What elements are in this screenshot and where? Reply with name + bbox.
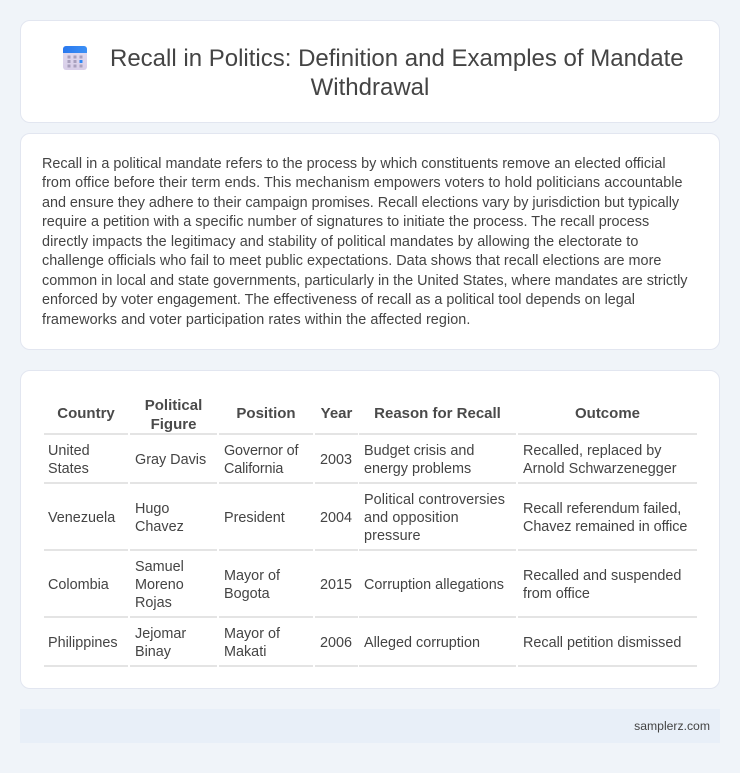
row: United States: California [224, 461, 283, 477]
row: Venezuela: Recall referendum failed, [523, 501, 681, 517]
table header: Figure [151, 416, 196, 433]
row: United States: Recalled, replaced by [523, 443, 661, 459]
row: Venezuela: President [224, 510, 285, 526]
row: Colombia: Colombia [48, 577, 109, 593]
table header: Reason for Recall [374, 405, 501, 422]
panel: description [20, 133, 720, 350]
row: Colombia: Corruption allegations [364, 577, 504, 593]
row: United States: energy problems [364, 461, 471, 477]
row: Colombia: Moreno [135, 577, 184, 593]
row: Colombia: Bogota [224, 586, 270, 602]
row: Venezuela: Hugo [135, 501, 169, 517]
text block: description paragraph: challenge officials who fail to meet public expectations. Data shows that recall elections are more [42, 253, 661, 269]
footer bar [20, 709, 720, 743]
title: Recall in Politics: Definition and Examples of Mandate [110, 45, 684, 72]
row: Colombia [48, 559, 681, 611]
row: Philippines: Alleged corruption [364, 635, 480, 651]
footer text: samplerz.com [634, 719, 710, 733]
text block: description paragraph [42, 156, 688, 328]
row: Venezuela: 2004 [320, 510, 352, 526]
row: United States [48, 443, 677, 477]
text block: description paragraph: from office before their term ends. This mechanism empowers voters to hold politicians accountable [42, 175, 683, 191]
row: United States: Budget crisis and [364, 443, 474, 459]
row: Philippines [48, 626, 681, 660]
row: Venezuela: Venezuela [48, 510, 115, 526]
text block: description paragraph: directly impacts the legitimacy and stability of political mandates by allowing the electorate to [42, 234, 638, 250]
row: Philippines: Recall petition dismissed [523, 635, 681, 651]
table header: Political [145, 397, 202, 414]
text block: description paragraph: Recall in a political mandate refers to the process by which constituents remove an elected official [42, 156, 666, 172]
row: Colombia: 2015 [320, 577, 352, 593]
row: Venezuela: and opposition [364, 510, 459, 526]
title: Withdrawal [311, 74, 429, 101]
table header: Outcome [575, 405, 640, 422]
text block: description paragraph: common in local and state governments, particularly in the United States, where mandates are strictly [42, 273, 688, 289]
row: Colombia: from office [523, 586, 590, 602]
table header: Position [236, 405, 296, 422]
row: Philippines: Philippines [48, 635, 118, 651]
row: United States: States [48, 461, 89, 477]
row: Venezuela: Chavez [135, 519, 184, 535]
row: United States: United [48, 443, 90, 459]
row: United States: 2003 [320, 452, 352, 468]
text block: description paragraph: frameworks and voter participation rates within the affected region. [42, 312, 470, 328]
row: Venezuela: Political controversies [364, 492, 505, 508]
icon: calendar [63, 46, 87, 70]
row: Philippines: 2006 [320, 635, 352, 651]
row: Colombia: Mayor of [224, 568, 280, 584]
row: Philippines: Binay [135, 644, 171, 660]
panel: table card [20, 370, 720, 689]
row: Colombia: Samuel [135, 559, 184, 575]
title [110, 45, 684, 101]
row: Philippines: Jejomar [135, 626, 186, 642]
table: recall examples [44, 397, 697, 667]
row: Colombia: Recalled and suspended [523, 568, 681, 584]
table header: Country [57, 405, 115, 422]
row: Venezuela [48, 492, 687, 544]
row: United States: Governor of [224, 443, 298, 459]
row: United States: Gray Davis [135, 452, 206, 468]
text block: description paragraph: and ensure they adhere to their campaign promises. Recall elections vary by jurisdiction but typically [42, 195, 679, 211]
row: Venezuela: Chavez remained in office [523, 519, 687, 535]
row: United States: Arnold Schwarzenegger [523, 461, 677, 477]
row: Colombia: Rojas [135, 595, 172, 611]
row: Venezuela: pressure [364, 528, 421, 544]
table header [57, 397, 640, 433]
table header: Year [321, 405, 352, 422]
row: Philippines: Makati [224, 644, 266, 660]
row: Philippines: Mayor of [224, 626, 280, 642]
text block: description paragraph: require a petition with a specific number of signatures to initiate the process. The recall process [42, 214, 649, 230]
text block: description paragraph: enforced by voter engagement. The effectiveness of recall as a political tool depends on legal [42, 292, 635, 308]
panel: title card [20, 20, 720, 123]
